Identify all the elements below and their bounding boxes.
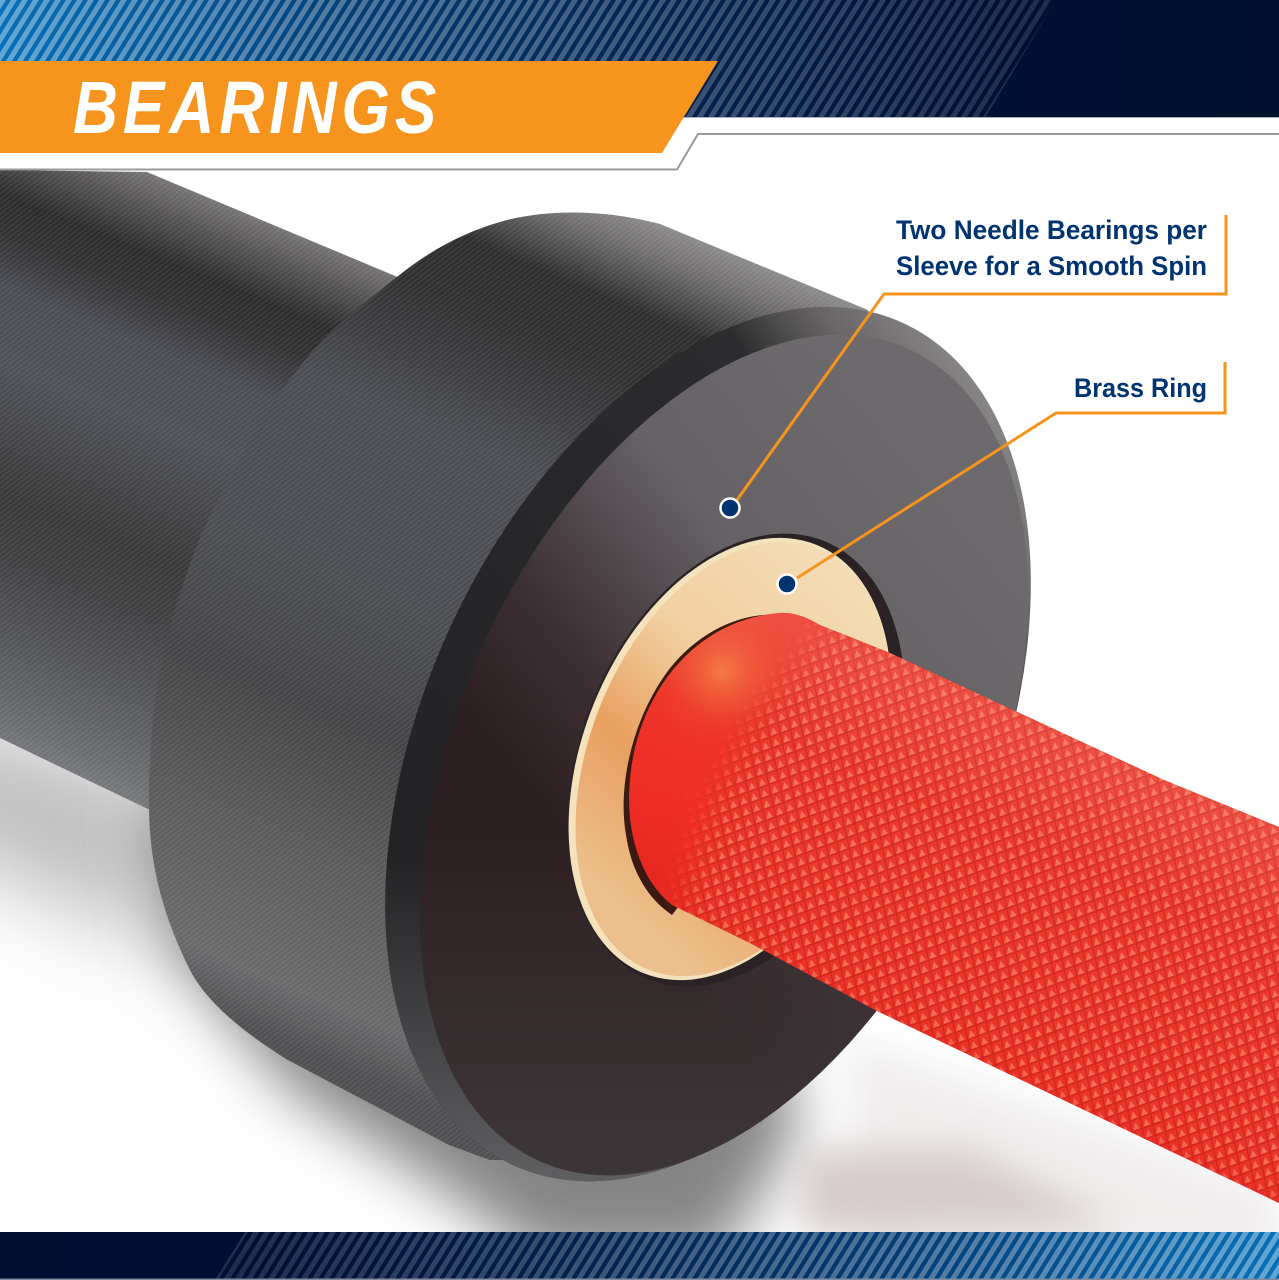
leader line: brass ring [797, 362, 1225, 578]
face flat lower tone [297, 239, 1151, 1271]
header white step [0, 118, 1279, 169]
label: brass ring: Brass Ring [1074, 373, 1207, 403]
floor shadows [0, 738, 1279, 1232]
brass ring [504, 483, 968, 1037]
label: needle bearings: Sleeve for a Smooth Spin [896, 251, 1207, 281]
face flat [297, 239, 1151, 1271]
marker dot: needle bearings [720, 498, 740, 518]
red knurled bar [624, 613, 1279, 1203]
face chamfer [255, 204, 1161, 1280]
header grey rule [0, 134, 1279, 170]
face chamfer lower light [255, 204, 1161, 1280]
marker dot: brass ring [778, 574, 796, 594]
sleeve end face [255, 204, 1161, 1280]
callout: needle bearings [720, 215, 1226, 518]
leader line: needle bearings [737, 215, 1226, 500]
title: BEARINGS [73, 67, 441, 149]
sleeve collar [149, 212, 868, 1160]
footer band [0, 1232, 1279, 1280]
bar shaft cylinder [0, 170, 400, 810]
title banner [0, 61, 718, 153]
header band [0, 0, 1279, 118]
callout: brass ring [778, 362, 1225, 594]
label: needle bearings: Two Needle Bearings per [896, 215, 1207, 245]
